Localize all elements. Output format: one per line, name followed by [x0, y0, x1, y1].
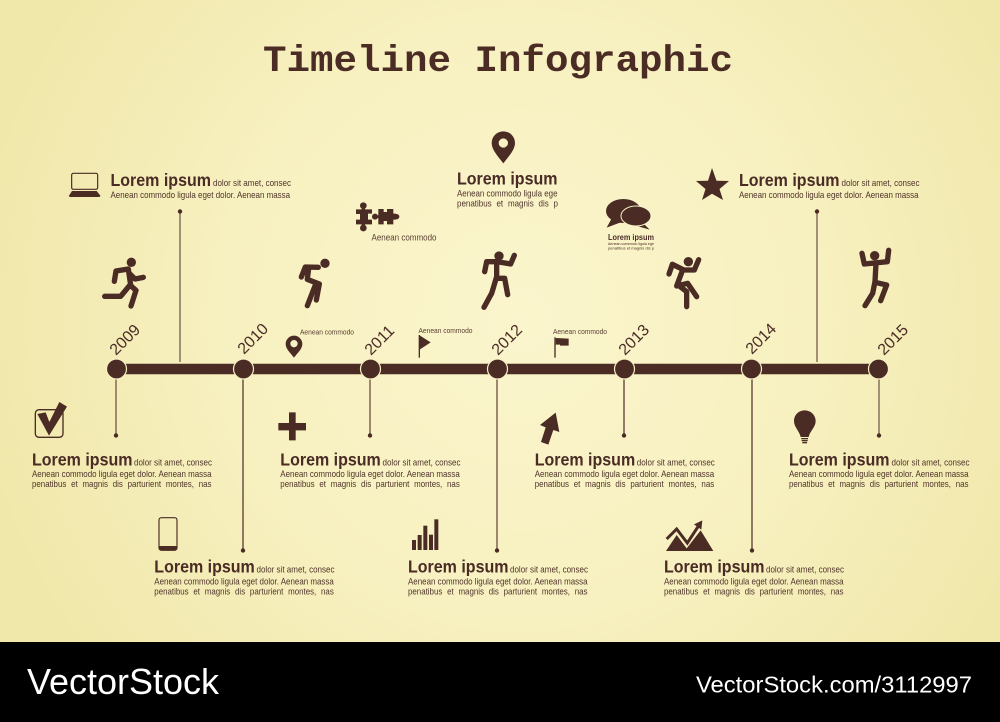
block: arrow note: Aenean commodo ligula eget dolor. Aenean massa — [535, 469, 715, 479]
block: star note: dolor sit amet, consec — [842, 178, 920, 188]
block: star note: Lorem ipsum — [739, 170, 840, 190]
footer logo: VectorStock — [27, 661, 220, 702]
block: chat note: Lorem ipsum — [608, 233, 654, 242]
year labels — [107, 321, 912, 359]
year labels: 2012 — [489, 322, 526, 359]
block: location note — [457, 131, 558, 208]
block: plus note — [278, 412, 461, 489]
block: light bulb note: penatibus et magnis dis parturient montes, nas — [789, 479, 969, 489]
year labels: 2013 — [616, 322, 653, 359]
block: phone note: penatibus et magnis dis parturient montes, nas — [154, 586, 334, 596]
block: light bulb note — [789, 410, 970, 489]
icon: puzzle pieces — [356, 202, 399, 231]
icon: star — [696, 168, 729, 200]
block: light bulb note: Lorem ipsum — [789, 450, 890, 470]
figure: runner 2009 — [105, 258, 143, 306]
block: star note — [696, 168, 920, 200]
block: arrow note: Lorem ipsum — [535, 450, 635, 470]
year labels: 2015 — [875, 322, 912, 359]
block: checkbox note: Lorem ipsum — [32, 450, 132, 470]
icon: light bulb — [794, 410, 816, 443]
block: mountain chart note: dolor sit amet, consec — [766, 565, 844, 575]
block: laptop note: dolor sit amet, consec — [213, 178, 291, 188]
year labels: 2010 — [235, 321, 272, 358]
year labels: 2014 — [743, 321, 780, 358]
block: checkbox note: penatibus et magnis dis parturient montes, nas — [32, 479, 212, 489]
block: mountain chart note: penatibus et magnis dis parturient montes, nas — [664, 586, 844, 596]
block: mountain chart note: Aenean commodo ligula eget dolor. Aenean massa — [664, 576, 844, 586]
block: puzzle note: Aenean commodo — [372, 232, 437, 242]
icon: checkbox — [35, 402, 67, 437]
block: plus note: Lorem ipsum — [280, 450, 381, 470]
block: location note: penatibus et magnis dis p — [457, 198, 558, 208]
block: bar chart note: penatibus et magnis dis parturient montes, nas — [408, 586, 588, 596]
icon: square flag — [554, 337, 569, 358]
block: arrow note — [535, 413, 715, 489]
figure: crouching runner 2010 — [301, 259, 330, 306]
connector lines — [114, 209, 881, 553]
icon: up arrow — [540, 413, 559, 445]
block: laptop note — [69, 170, 291, 200]
block: flag milestone two: Aenean commodo — [553, 327, 607, 336]
block: chat note: Aenean commodo ligula ege — [608, 242, 654, 246]
block: puzzle note — [356, 202, 437, 242]
block: checkbox note — [32, 402, 212, 489]
icon: location pin — [492, 131, 515, 163]
block: plus note: dolor sit amet, consec — [382, 458, 461, 468]
block: bar chart note: dolor sit amet, consec — [510, 565, 588, 575]
block: checkbox note: dolor sit amet, consec — [134, 458, 212, 468]
block: checkbox note: Aenean commodo ligula eget dolor. Aenean massa — [32, 469, 212, 479]
block: phone note: Lorem ipsum — [154, 557, 255, 577]
block: light bulb note: dolor sit amet, consec — [892, 458, 970, 468]
year labels: 2009 — [107, 322, 144, 359]
block: flag milestone two — [553, 327, 607, 358]
timeline bar with nodes — [106, 359, 888, 379]
figure: jumping 2015 — [862, 250, 889, 306]
block: chat note: penatibus et magnis dis p — [608, 246, 654, 250]
footer image id: VectorStock.com/3112997 — [696, 672, 972, 698]
figure: running forward 2011 — [484, 251, 514, 307]
block: small pin milestone: Aenean commodo — [300, 328, 354, 336]
icon: bar chart — [412, 519, 438, 550]
block: mountain chart note — [664, 520, 844, 596]
block: light bulb note: Aenean commodo ligula eget dolor. Aenean massa — [789, 469, 969, 479]
block: arrow note: penatibus et magnis dis parturient montes, nas — [535, 479, 715, 489]
block: location note: Aenean commodo ligula ege — [457, 188, 558, 198]
icon: pennant flag — [419, 335, 431, 358]
block: mountain chart note: Lorem ipsum — [664, 557, 764, 577]
icon: laptop — [69, 173, 100, 197]
block: plus note: penatibus et magnis dis parturient montes, nas — [280, 479, 460, 489]
block: bar chart note — [408, 519, 588, 596]
block: star note: Aenean commodo ligula eget dolor. Aenean massa — [739, 190, 919, 200]
icon: speech bubbles — [606, 199, 651, 230]
block: plus note: Aenean commodo ligula eget dolor. Aenean massa — [280, 469, 461, 479]
block: bar chart note: Lorem ipsum — [408, 557, 508, 577]
title: Timeline Infographic — [263, 41, 733, 83]
block: laptop note: Lorem ipsum — [110, 170, 211, 190]
icon: small pin — [286, 336, 302, 358]
block: location note: Lorem ipsum — [457, 168, 558, 188]
block: bar chart note: Aenean commodo ligula eget dolor. Aenean massa — [408, 576, 588, 586]
figure: climbing 2013 — [669, 257, 699, 307]
icon: plus — [278, 412, 306, 440]
year labels: 2011 — [362, 322, 398, 359]
block: laptop note: Aenean commodo ligula eget dolor. Aenean massa — [110, 190, 291, 200]
block: arrow note: dolor sit amet, consec — [637, 458, 715, 468]
block: phone note: dolor sit amet, consec — [256, 565, 335, 575]
footer band — [0, 642, 1000, 722]
icon: smartphone — [159, 518, 177, 550]
block: chat note — [606, 199, 654, 250]
block: phone note: Aenean commodo ligula eget dolor. Aenean massa — [154, 576, 335, 586]
block: phone note — [154, 518, 335, 596]
icon: mountain trend — [666, 520, 713, 551]
block: flag milestone one: Aenean commodo — [418, 326, 472, 335]
block: small pin milestone — [286, 328, 354, 358]
block: flag milestone one — [418, 326, 472, 358]
